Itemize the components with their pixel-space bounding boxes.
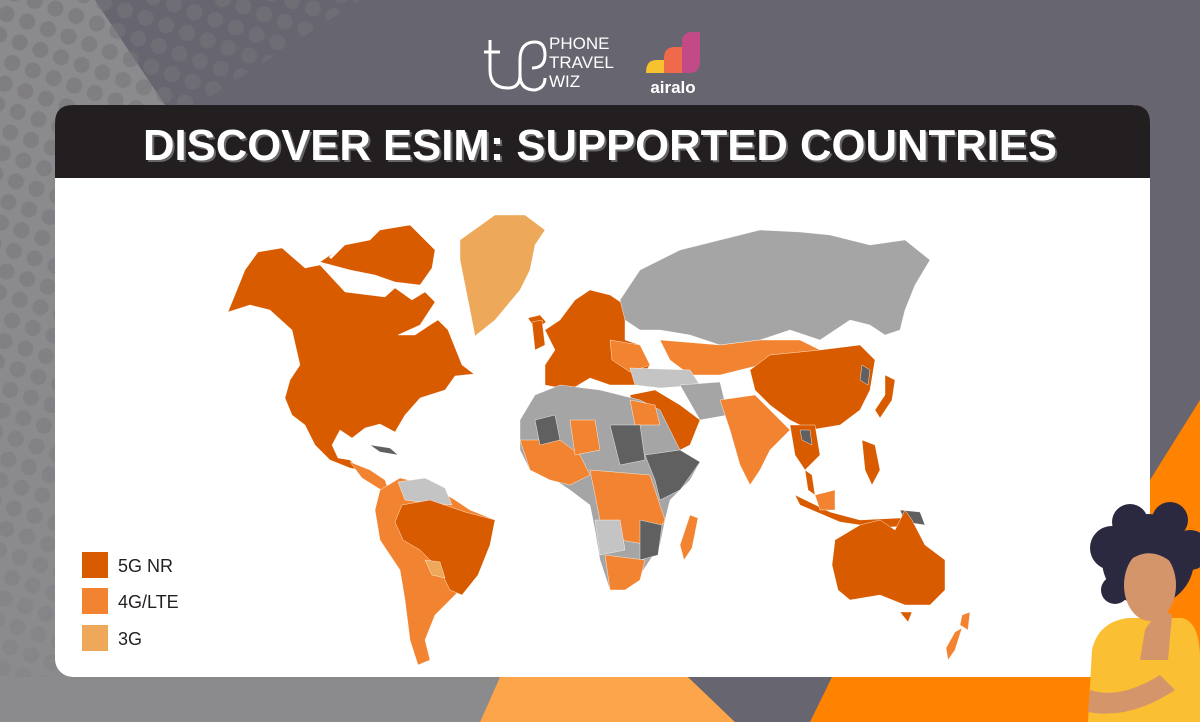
legend: 4G/LTE — [118, 592, 179, 612]
central asia — [660, 340, 820, 375]
logo: phone travel wiz — [484, 34, 614, 91]
logo: phone travel wiz: TRAVEL — [549, 53, 614, 72]
japan & korea — [875, 375, 895, 418]
title: DISCOVER ESIM: SUPPORTED COUNTRIES — [145, 123, 1059, 172]
new zealand — [946, 612, 970, 660]
india — [720, 395, 790, 485]
middle east — [630, 368, 700, 388]
europe — [545, 290, 650, 390]
greenland — [460, 215, 545, 336]
north america — [228, 248, 474, 470]
card — [55, 105, 1150, 677]
logo: airalo — [646, 32, 700, 97]
africa — [520, 385, 700, 590]
logo: phone travel wiz: WIZ — [549, 72, 580, 91]
logo: phone travel wiz: PHONE — [549, 34, 609, 53]
se asia — [790, 425, 820, 470]
legend: 5G NR — [118, 556, 173, 576]
world map — [228, 215, 970, 665]
legend — [82, 552, 179, 651]
caribbean — [370, 445, 398, 455]
title: DISCOVER ESIM: SUPPORTED COUNTRIES — [143, 121, 1057, 170]
character — [1088, 502, 1200, 722]
madagascar — [680, 515, 698, 560]
logo: airalo: airalo — [650, 78, 696, 97]
russia — [620, 230, 930, 345]
central & south america — [350, 462, 390, 495]
australia — [832, 510, 945, 605]
china — [750, 345, 875, 430]
legend: 3G — [118, 629, 142, 649]
